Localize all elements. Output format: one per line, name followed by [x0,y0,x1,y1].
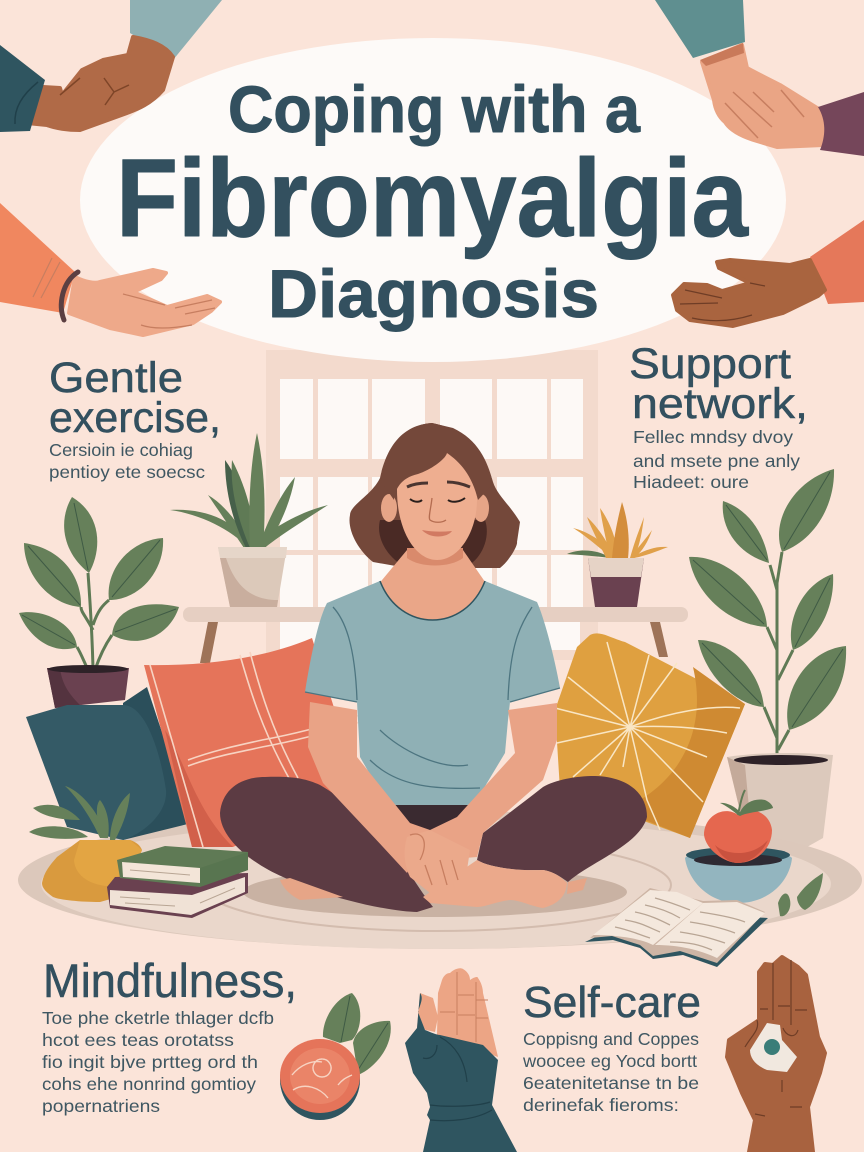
text: gentle exercise body: pentioy ete soecsc [49,462,205,482]
title: Diagnosis [268,256,599,332]
text: self-care body: Coppisng and Coppes [523,1029,699,1049]
nose [429,498,446,522]
arms [308,702,430,873]
hand: mid right [673,220,864,326]
plant: left tall [19,497,179,708]
heading: support network: network, [632,380,808,428]
person [220,423,647,912]
text: self-care body: woocee eg Yocd bortt [522,1051,697,1071]
hands [405,830,470,893]
text: mindfulness body: hcot ees teas orotatss [42,1030,234,1050]
pillow: mustard [555,633,745,838]
face [397,453,477,560]
text: mindfulness body [42,1008,274,1116]
ears [381,494,397,522]
heading: gentle exercise: Gentle [49,354,183,402]
text: self-care body: derinefak fieroms: [523,1095,679,1115]
hand: top left [0,0,222,132]
hand: mid left [0,203,220,335]
mouth [422,530,452,536]
text: support network body: Hiadeet: oure [633,472,749,492]
icon: hand holding eye charm [727,957,825,1152]
text: mindfulness body: cohs ehe nonrind gomtioy [42,1074,256,1094]
text: support network body: Fellec mndsy dvoy [633,427,793,447]
neck [372,550,492,632]
title [116,72,749,332]
heading: gentle exercise: exercise, [49,394,221,442]
text: mindfulness body: popernatriens [42,1096,160,1116]
text: mindfulness body: fio ingit bjve prtteg ord th [42,1052,258,1072]
text: self-care body [522,1029,699,1115]
bowl with apple [685,790,823,916]
heading: mindfulness: Mindfulness, [43,954,297,1007]
text: gentle exercise body [49,440,205,482]
right leg [477,776,647,882]
text: self-care body: 6eatenitetanse tn be [523,1073,699,1093]
feet [280,878,343,900]
closed eyes and brows [410,498,465,502]
hair back [350,423,520,568]
plant: shelf right [567,502,668,607]
title: Fibromyalgia [116,137,749,260]
text: support network body [633,427,800,492]
icon: hand with teal sleeve [405,968,517,1152]
title: Coping with a [228,72,641,146]
shirt [305,581,560,807]
pillow: teal [26,687,192,840]
plant: right tall [689,469,846,847]
hand: top right [655,0,864,156]
heading: gentle exercise [49,354,221,442]
bangs [380,423,492,500]
heading: support network: Support [629,340,791,388]
left leg [220,777,433,912]
heading: support network [629,340,808,428]
crotch shadow [393,805,483,860]
title background ellipse [80,38,786,362]
icon: fruit and leaves [280,993,391,1120]
plant: yellow pot [29,786,142,902]
pillow: coral [144,638,360,847]
text: gentle exercise body: Cersioin ie cohiag [49,440,193,460]
stacked books [107,846,248,918]
floor rug [18,811,862,949]
shelf [183,607,688,663]
plant: shelf left [170,433,328,607]
open book [585,888,768,967]
window [266,350,598,660]
heading: self-care: Self-care [523,978,701,1027]
text: mindfulness body: Toe phe cketrle thlager dcfb [42,1008,274,1028]
text: support network body: and msete pne anly [633,451,800,471]
